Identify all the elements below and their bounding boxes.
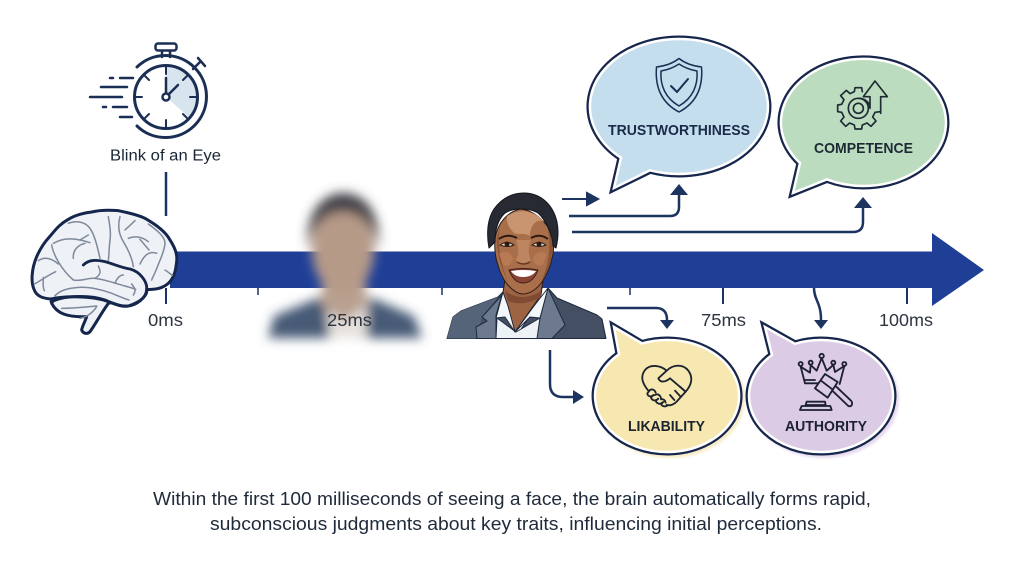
icon: crown and gavel [799,354,852,410]
arrowhead: competence [854,197,872,208]
connector line [165,172,167,216]
panel: authority bubble [749,327,899,458]
panel: likability bubble [595,327,745,458]
axis labels [148,310,933,330]
blurred face at 25ms [268,193,422,338]
arrow: to trustworthiness [569,195,679,216]
caption: Blink of an Eye: Blink of an Eye [110,148,221,164]
arrow: to likability [607,308,667,320]
text block: summary [153,489,871,534]
portrait: sharp face [447,193,606,338]
label: likability: LIKABILITY [628,418,705,435]
summary line 1: Within the first 100 milliseconds of seeing a face, the brain automatically forms rapid, [153,489,871,509]
panel: competence bubble [781,59,946,193]
label: 0ms: 0ms [148,310,183,330]
label: 25ms: 25ms [327,310,372,330]
label: trustworthiness: TRUSTWORTHINESS [608,122,750,139]
label: 100ms: 100ms [879,310,933,330]
arrow: side to likability [550,350,575,397]
label: 75ms: 75ms [701,310,746,330]
arrowhead: trustworthiness [670,184,688,195]
icon: stopwatch [90,44,206,137]
icon: brain [32,210,177,333]
label: authority: AUTHORITY [785,418,867,435]
label: competence: COMPETENCE [814,140,913,157]
icon: gear with arrow [838,81,887,129]
arrow: to authority [814,288,821,320]
arrowhead: likability [660,320,674,329]
arrowhead: side to likability [573,390,584,404]
arrow: to competence [572,207,863,232]
icon: shield [656,58,702,112]
icon: handshake heart [642,366,691,406]
panel: trustworthiness bubble [590,39,768,188]
summary line 2: subconscious judgments about key traits, influencing initial perceptions. [210,514,822,534]
arrowhead: authority [814,320,828,329]
arrow: to trustworthiness short [562,193,598,205]
timeline arrow [166,233,984,306]
